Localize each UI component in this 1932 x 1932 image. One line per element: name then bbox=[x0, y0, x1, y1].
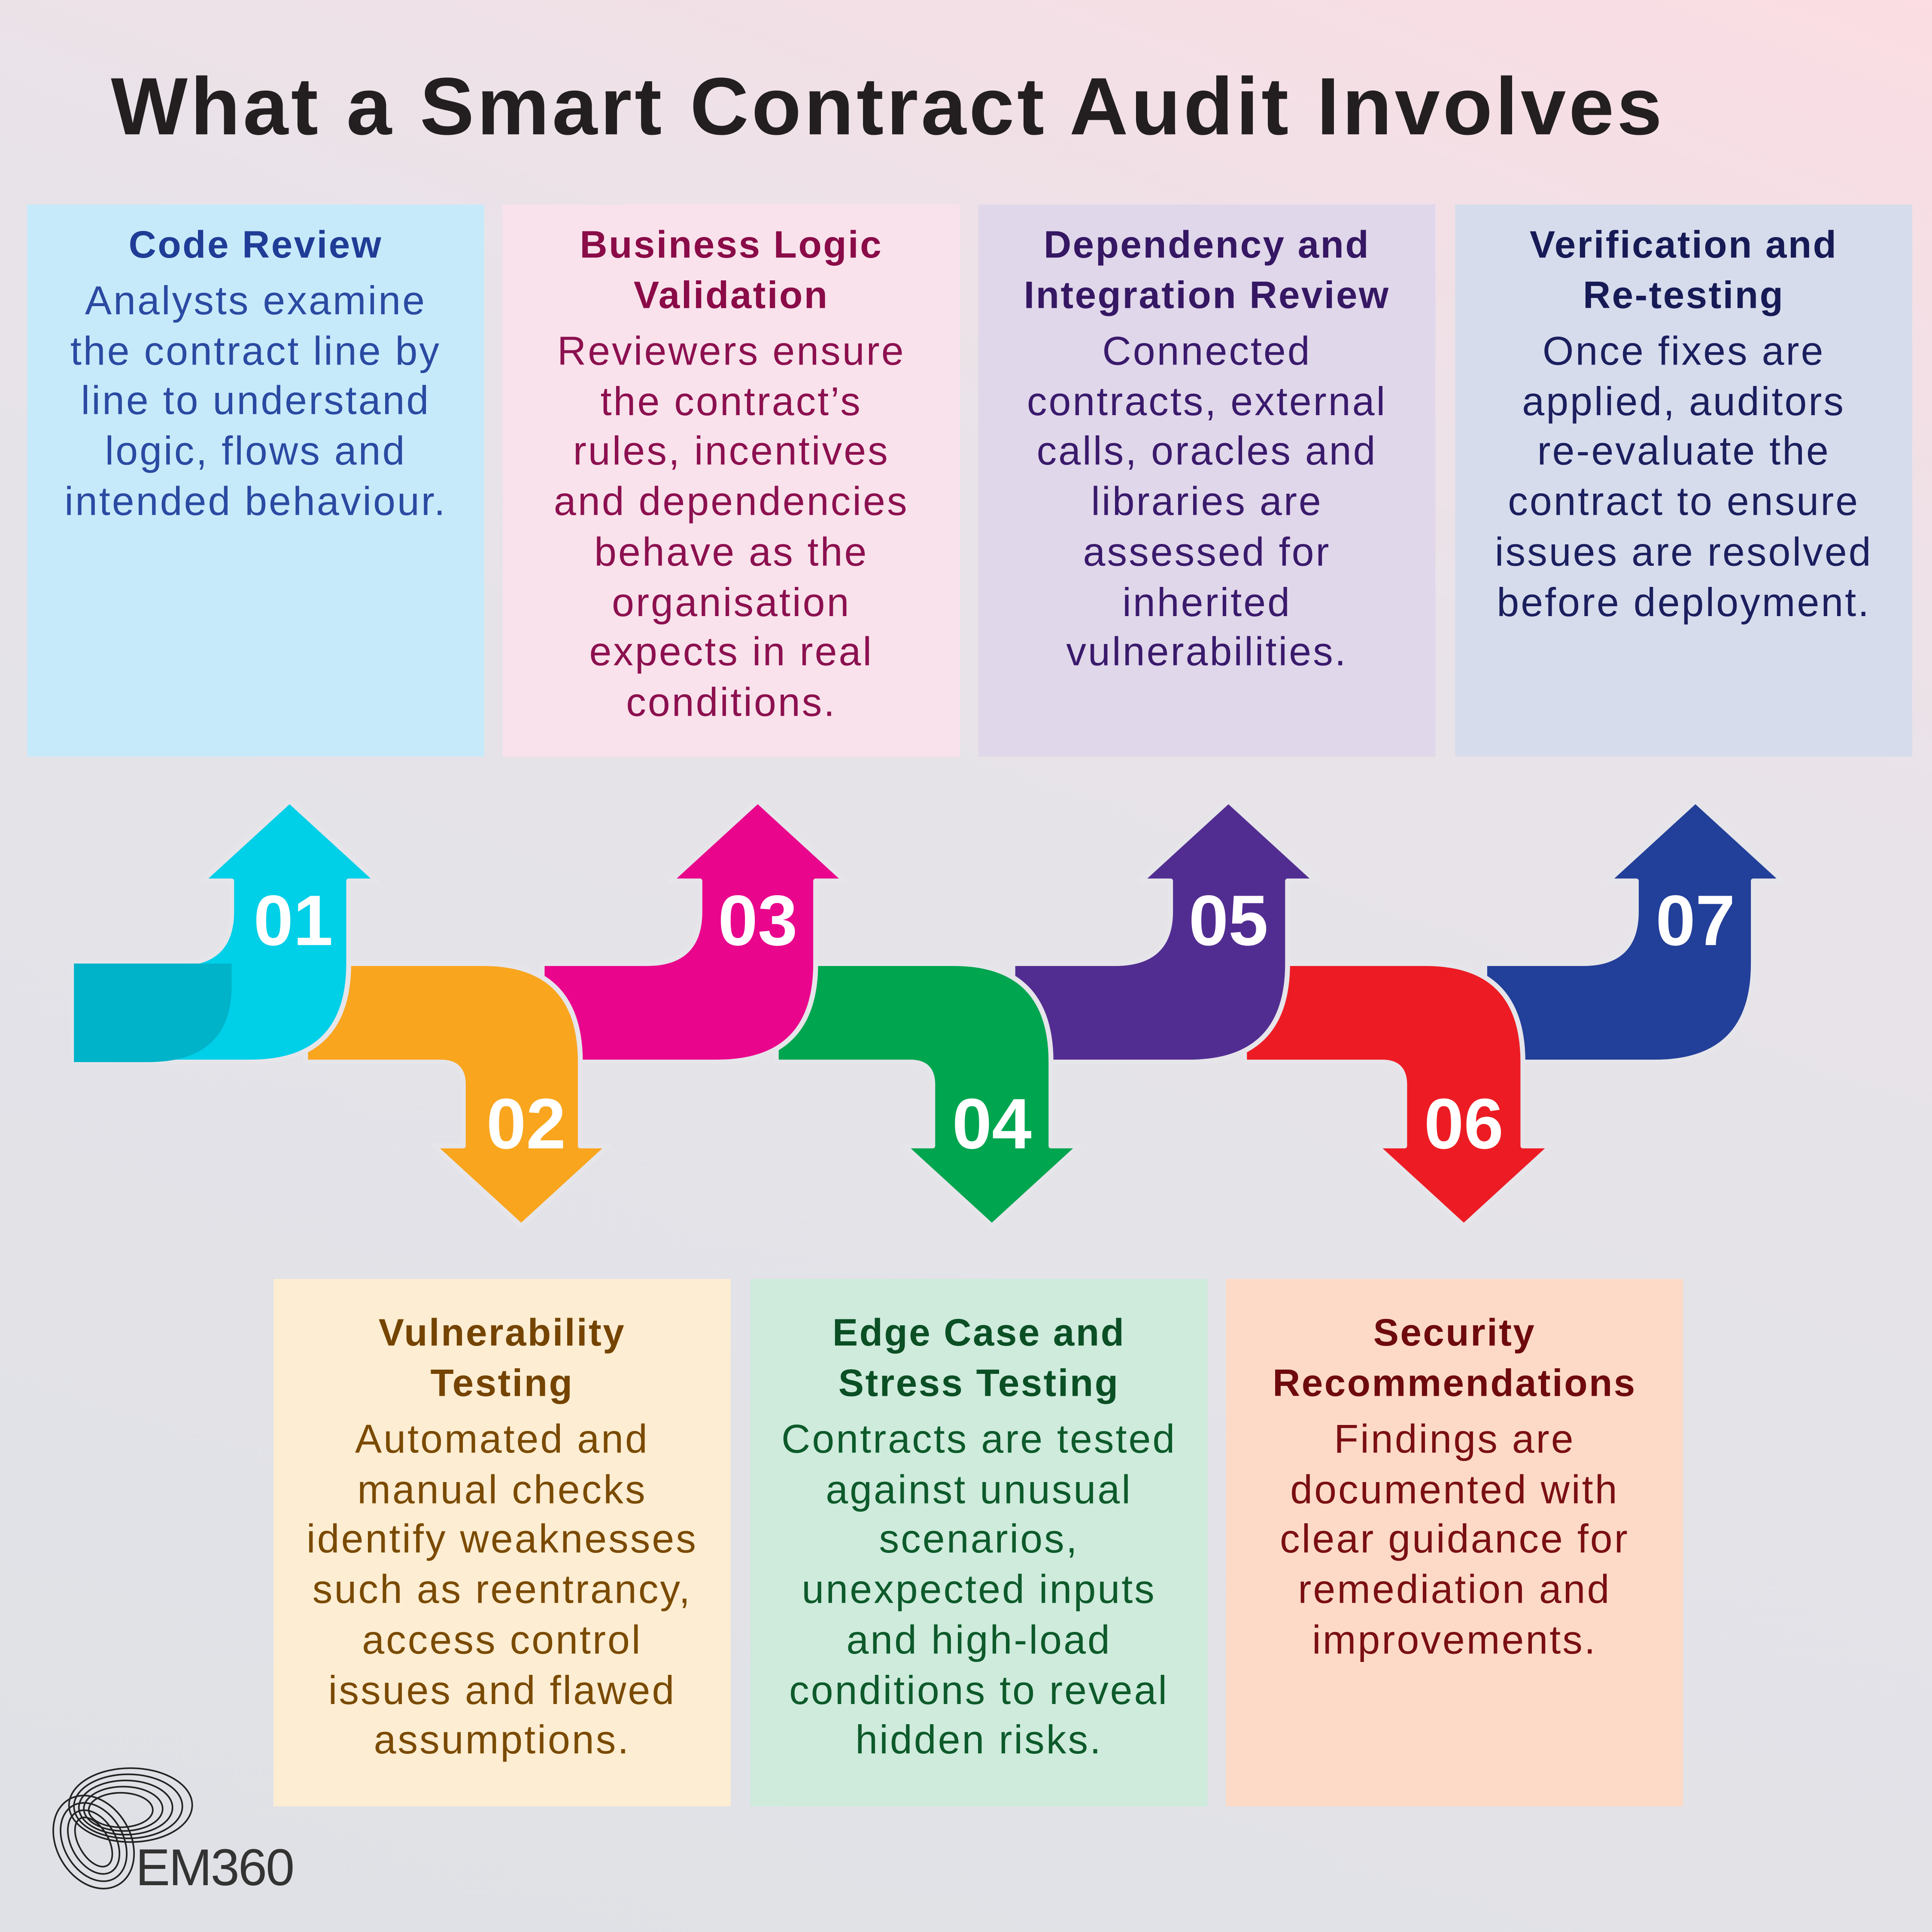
panel: edge case and stress testing: conditions to reveal bbox=[789, 1668, 1169, 1712]
panel: security recommendations: clear guidance for bbox=[1280, 1517, 1629, 1561]
panel: business logic validation: Reviewers ensure bbox=[557, 329, 905, 374]
panel: dependency and integration review: Dependency and bbox=[1044, 223, 1370, 266]
panel: dependency and integration review: Integration Review bbox=[1024, 273, 1390, 317]
panel: verification and re-testing: re-evaluate the bbox=[1537, 429, 1830, 474]
arrow 03 bbox=[542, 801, 845, 1062]
panel: code review: Analysts examine bbox=[85, 279, 426, 323]
panel: vulnerability testing: Automated and bbox=[355, 1417, 649, 1461]
panel: security recommendations: Security bbox=[1373, 1311, 1536, 1354]
panel: dependency and integration review: calls, oracles and bbox=[1037, 429, 1377, 474]
panel: vulnerability testing: access control bbox=[362, 1618, 642, 1662]
arrow 06 bbox=[1245, 963, 1551, 1226]
panel: edge case and stress testing: scenarios, bbox=[879, 1517, 1079, 1561]
panel: dependency and integration review bbox=[978, 204, 1435, 756]
arrow 04 bbox=[776, 963, 1079, 1226]
panel: dependency and integration review: Connected bbox=[1102, 329, 1312, 374]
title: What a Smart Contract Audit Involves bbox=[111, 61, 1665, 152]
panel: edge case and stress testing: Stress Testing bbox=[838, 1361, 1119, 1405]
panel: dependency and integration review: vulnerabilities. bbox=[1066, 630, 1348, 674]
panel: edge case and stress testing: and high-load bbox=[846, 1618, 1112, 1662]
panel: edge case and stress testing: Edge Case and bbox=[832, 1311, 1125, 1354]
panel: security recommendations: remediation and bbox=[1298, 1567, 1611, 1612]
panel: verification and re-testing: Re-testing bbox=[1583, 273, 1784, 317]
panel: business logic validation: conditions. bbox=[626, 680, 836, 724]
panel: business logic validation: and dependencies bbox=[554, 480, 909, 524]
panel: business logic validation: organisation bbox=[612, 580, 851, 624]
panel: code review: intended behaviour. bbox=[64, 479, 447, 523]
arrow 06: 06 bbox=[1424, 1084, 1504, 1164]
panel: verification and re-testing bbox=[1455, 204, 1912, 756]
panel: business logic validation bbox=[503, 204, 960, 756]
panel: edge case and stress testing: unexpected inputs bbox=[802, 1567, 1156, 1612]
arrow 03: 03 bbox=[718, 881, 798, 960]
arrow 07: 07 bbox=[1656, 881, 1735, 960]
panel: security recommendations: improvements. bbox=[1312, 1618, 1597, 1662]
panel: edge case and stress testing bbox=[750, 1279, 1207, 1806]
panel: business logic validation: expects in real bbox=[589, 630, 873, 674]
panel: security recommendations: Recommendations bbox=[1273, 1361, 1637, 1405]
arrow 07 bbox=[1485, 801, 1783, 1062]
panel: vulnerability testing: identify weaknesses bbox=[307, 1517, 698, 1561]
arrow 05 bbox=[1013, 801, 1316, 1062]
panel: dependency and integration review: contracts, external bbox=[1027, 379, 1387, 423]
panel: verification and re-testing: contract to ensure bbox=[1508, 480, 1859, 524]
arrow 01: 01 bbox=[253, 881, 333, 960]
panel: code review: the contract line by bbox=[70, 328, 441, 373]
panel: vulnerability testing: Testing bbox=[431, 1361, 574, 1405]
panel: verification and re-testing: Verification and bbox=[1530, 223, 1838, 266]
panel: dependency and integration review: inherited bbox=[1122, 580, 1291, 624]
panel: code review bbox=[27, 204, 484, 756]
arrow 02: 02 bbox=[486, 1084, 566, 1164]
arrow 05: 05 bbox=[1189, 881, 1268, 960]
panel: vulnerability testing bbox=[273, 1279, 731, 1806]
panel: verification and re-testing: before deployment. bbox=[1497, 580, 1871, 624]
panel: business logic validation: the contract’s bbox=[601, 379, 862, 423]
panel: business logic validation: rules, incentives bbox=[573, 429, 890, 474]
panel: vulnerability testing: Vulnerability bbox=[379, 1311, 626, 1354]
logo: EM360: EM360 bbox=[136, 1838, 293, 1896]
panel: vulnerability testing: manual checks bbox=[357, 1467, 647, 1512]
arrow 04: 04 bbox=[952, 1084, 1032, 1164]
panel: edge case and stress testing: against unusual bbox=[826, 1467, 1132, 1512]
panel: verification and re-testing: Once fixes are bbox=[1543, 329, 1825, 374]
panel: business logic validation: Validation bbox=[634, 273, 829, 317]
panel: business logic validation: behave as the bbox=[594, 530, 868, 574]
panel: security recommendations bbox=[1226, 1279, 1683, 1806]
panel: vulnerability testing: issues and flawed bbox=[328, 1668, 676, 1712]
arrow 01 bbox=[74, 801, 377, 1062]
panel: verification and re-testing: issues are resolved bbox=[1495, 530, 1873, 574]
panel: security recommendations: documented with bbox=[1290, 1467, 1619, 1512]
panel: security recommendations: Findings are bbox=[1334, 1417, 1575, 1461]
panel: code review: line to understand bbox=[81, 379, 430, 423]
panel: verification and re-testing: applied, auditors bbox=[1522, 379, 1845, 423]
panel: dependency and integration review: libraries are bbox=[1091, 480, 1323, 524]
panel: dependency and integration review: assessed for bbox=[1083, 530, 1331, 574]
panel: edge case and stress testing: hidden risks. bbox=[855, 1718, 1103, 1762]
panel: vulnerability testing: such as reentrancy, bbox=[313, 1567, 692, 1612]
panel: edge case and stress testing: Contracts are tested bbox=[781, 1417, 1176, 1461]
panel: code review: logic, flows and bbox=[105, 429, 406, 473]
panel: business logic validation: Business Logic bbox=[580, 223, 883, 266]
logo: EM360 bbox=[44, 1750, 316, 1910]
arrow 02 bbox=[306, 963, 609, 1226]
panel: code review: Code Review bbox=[129, 223, 383, 266]
panel: vulnerability testing: assumptions. bbox=[374, 1718, 630, 1762]
